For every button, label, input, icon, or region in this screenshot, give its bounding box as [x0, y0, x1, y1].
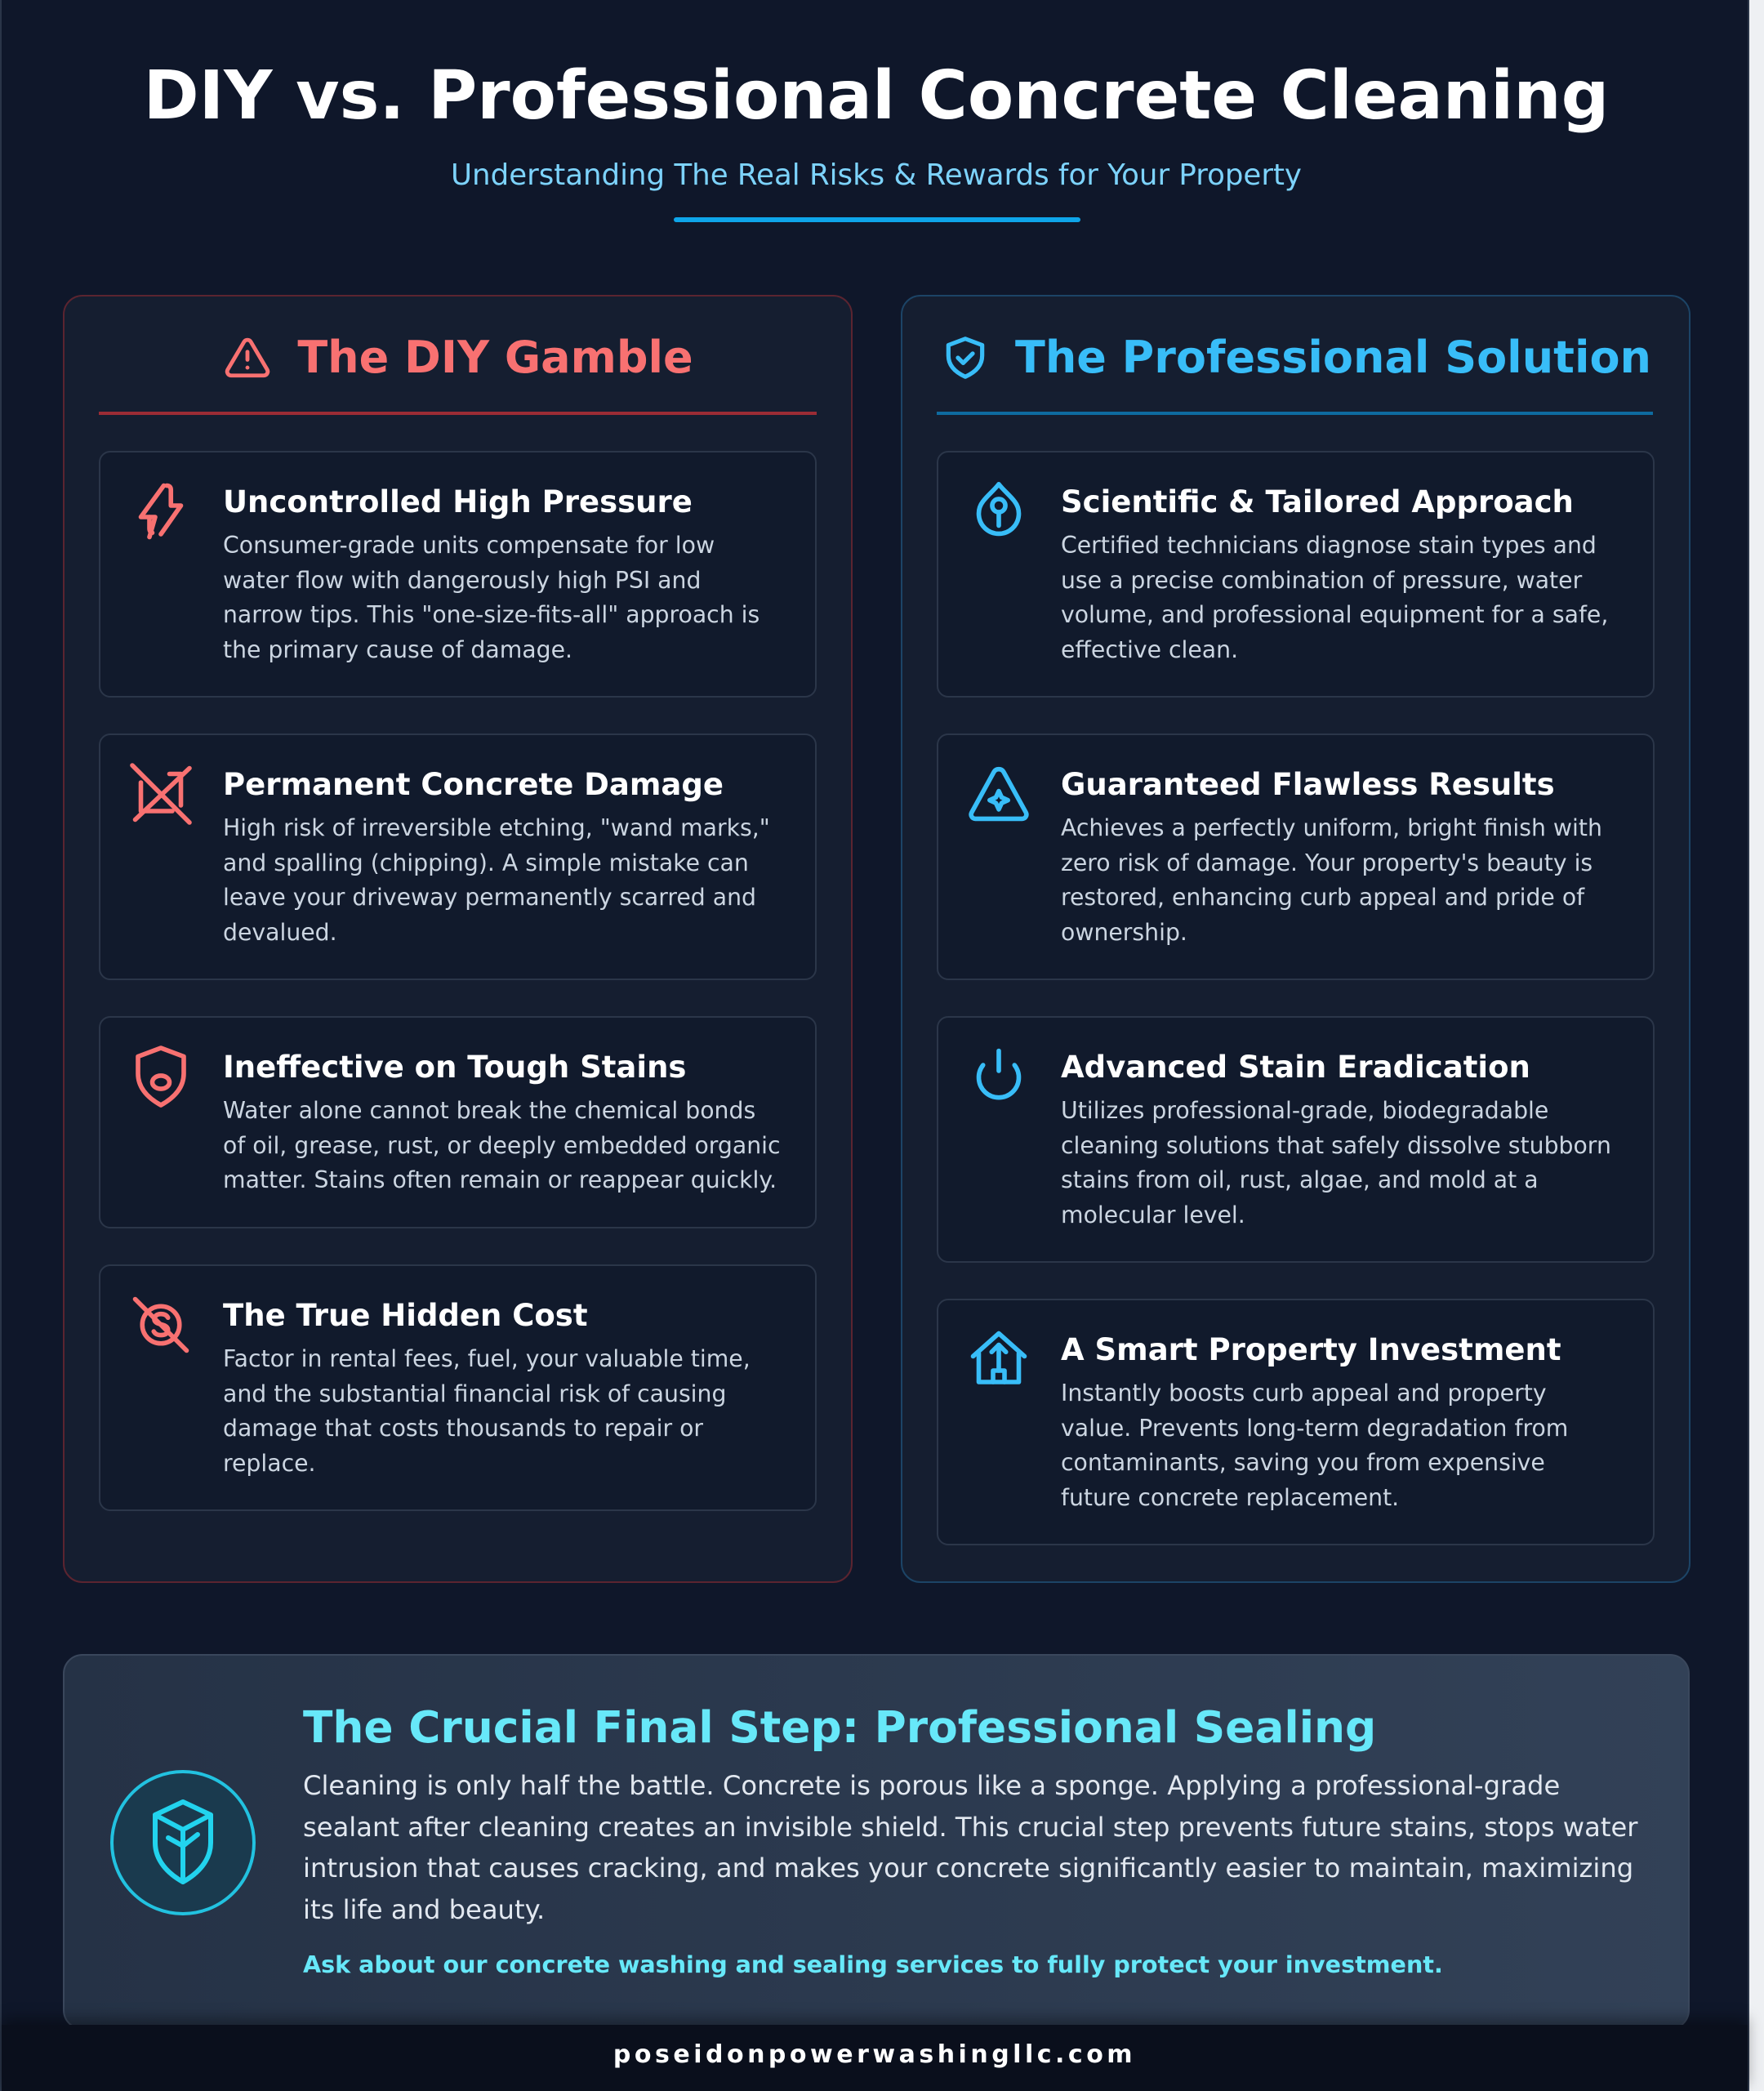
card: A Smart Property Investment: A Smart Property Investment — [1061, 1332, 1561, 1367]
icon: house arrow — [970, 1331, 1027, 1384]
card: A Smart Property Investment: Instantly boosts curb appeal and property — [1061, 1380, 1547, 1407]
card: Advanced Stain Eradication: cleaning solutions that safely dissolve stubborn — [1061, 1132, 1611, 1158]
card: Scientific & Tailored Approach: Scientific & Tailored Approach — [1061, 484, 1574, 519]
card: Scientific & Tailored Approach: Certified technicians diagnose stain types and — [1061, 532, 1597, 559]
body text: sealant after cleaning creates an invisible shield. This crucial step prevents future stains, stops water — [303, 1812, 1638, 1843]
card: Permanent Concrete Damage: High risk of irreversible etching, "wand marks," — [223, 814, 770, 841]
card: Ineffective on Tough Stains: matter. Stains often remain or reappear quickly. — [223, 1166, 777, 1193]
card: Advanced Stain Eradication: Utilizes professional-grade, biodegradable — [1061, 1097, 1548, 1124]
icon: triangle sparkle — [969, 766, 1029, 822]
card: Uncontrolled High Pressure: narrow tips. This "one-size-fits-all" approach is — [223, 601, 760, 628]
card: Guaranteed Flawless Results: Guaranteed Flawless Results — [1061, 767, 1555, 802]
card: Scientific & Tailored Approach: use a precise combination of pressure, water — [1061, 567, 1582, 593]
card: Uncontrolled High Pressure: water flow with dangerously high PSI and — [223, 567, 701, 593]
card: Ineffective on Tough Stains: Water alone cannot break the chemical bonds — [223, 1097, 755, 1124]
card: A Smart Property Investment — [937, 1299, 1655, 1545]
card: Permanent Concrete Damage: Permanent Concrete Damage — [223, 767, 724, 802]
card: Guaranteed Flawless Results: zero risk of damage. Your property's beauty is — [1061, 849, 1592, 876]
heading: sealing: The Crucial Final Step: Professional Sealing — [303, 1701, 1376, 1753]
panel: sealing callout — [63, 1654, 1690, 2030]
card: A Smart Property Investment: contaminants, saving you from expensive — [1061, 1449, 1545, 1476]
footer — [2, 2025, 1748, 2091]
card: Ineffective on Tough Stains: of oil, grease, rust, or deeply embedded organic — [223, 1132, 781, 1158]
card: Uncontrolled High Pressure: Uncontrolled High Pressure — [223, 484, 693, 519]
card: Ineffective on Tough Stains — [99, 1016, 817, 1228]
card: Scientific & Tailored Approach: effective clean. — [1061, 635, 1238, 663]
card: Scientific & Tailored Approach: volume, and professional equipment for a safe, — [1061, 601, 1608, 628]
body text: Cleaning is only half the battle. Concrete is porous like a sponge. Applying a professional-grade — [303, 1770, 1560, 1801]
card: Guaranteed Flawless Results: restored, enhancing curb appeal and pride of — [1061, 884, 1584, 911]
card: The True Hidden Cost: The True Hidden Cost — [223, 1298, 588, 1333]
icon: lightning — [139, 484, 183, 539]
icon: power — [977, 1049, 1021, 1099]
card: The True Hidden Cost: Factor in rental fees, fuel, your valuable time, — [223, 1345, 751, 1372]
card: Uncontrolled High Pressure: Consumer-grade units compensate for low — [223, 532, 715, 559]
icon: drop target — [977, 482, 1021, 536]
card: The True Hidden Cost: and the substantial financial risk of causing — [223, 1380, 726, 1407]
card: The True Hidden Cost: replace. — [223, 1449, 316, 1477]
card: Uncontrolled High Pressure: the primary cause of damage. — [223, 635, 572, 663]
card: Guaranteed Flawless Results: Achieves a perfectly uniform, bright finish with — [1061, 814, 1602, 841]
body text: its life and beauty. — [303, 1894, 545, 1925]
icon: crossed dollar — [132, 1297, 189, 1353]
card: Scientific & Tailored Approach — [937, 451, 1655, 698]
card: Guaranteed Flawless Results: ownership. — [1061, 918, 1187, 946]
panel: DIY gamble — [63, 295, 853, 1583]
body text: intrusion that causes cracking, and makes your concrete significantly easier to maintain, maximizing — [303, 1852, 1633, 1884]
card: Permanent Concrete Damage: leave your driveway permanently scarred and — [223, 884, 756, 911]
icon: shield with dot — [136, 1046, 186, 1108]
icon: sealing shield circle — [110, 1770, 256, 1915]
footer: poseidonpowerwashingllc.com — [613, 2040, 1136, 2069]
card: Permanent Concrete Damage — [99, 733, 817, 980]
title: DIY vs. Professional Concrete Cleaning — [144, 57, 1609, 135]
call to action: Ask about our concrete washing and sealing services to fully protect your investment. — [303, 1951, 1443, 1978]
accent bar — [674, 217, 1080, 222]
heading: The DIY Gamble: The DIY Gamble — [297, 332, 693, 383]
heading: The Professional Solution: The Professional Solution — [1015, 332, 1651, 383]
icon: crossed box — [130, 763, 192, 825]
card: A Smart Property Investment: future concrete replacement. — [1061, 1483, 1399, 1511]
card: Permanent Concrete Damage: and spalling (chipping). A simple mistake can — [223, 849, 749, 876]
card: Guaranteed Flawless Results — [937, 733, 1655, 980]
card: Advanced Stain Eradication: stains from oil, rust, algae, and mold at a — [1061, 1166, 1539, 1193]
card: The True Hidden Cost — [99, 1264, 817, 1511]
card: Ineffective on Tough Stains: Ineffective on Tough Stains — [223, 1050, 686, 1085]
card: Uncontrolled High Pressure — [99, 451, 817, 698]
card: Permanent Concrete Damage: devalued. — [223, 918, 337, 946]
body text — [303, 1770, 1638, 1925]
subtitle: Understanding The Real Risks & Rewards for Your Property — [451, 158, 1302, 192]
card: A Smart Property Investment: value. Prevents long-term degradation from — [1061, 1415, 1568, 1441]
card: Advanced Stain Eradication: molecular level. — [1061, 1201, 1245, 1228]
card: Advanced Stain Eradication: Advanced Stain Eradication — [1061, 1050, 1530, 1085]
card: The True Hidden Cost: damage that costs thousands to repair or — [223, 1415, 703, 1442]
card: Advanced Stain Eradication — [937, 1016, 1655, 1263]
panel: Professional solution — [901, 295, 1690, 1583]
